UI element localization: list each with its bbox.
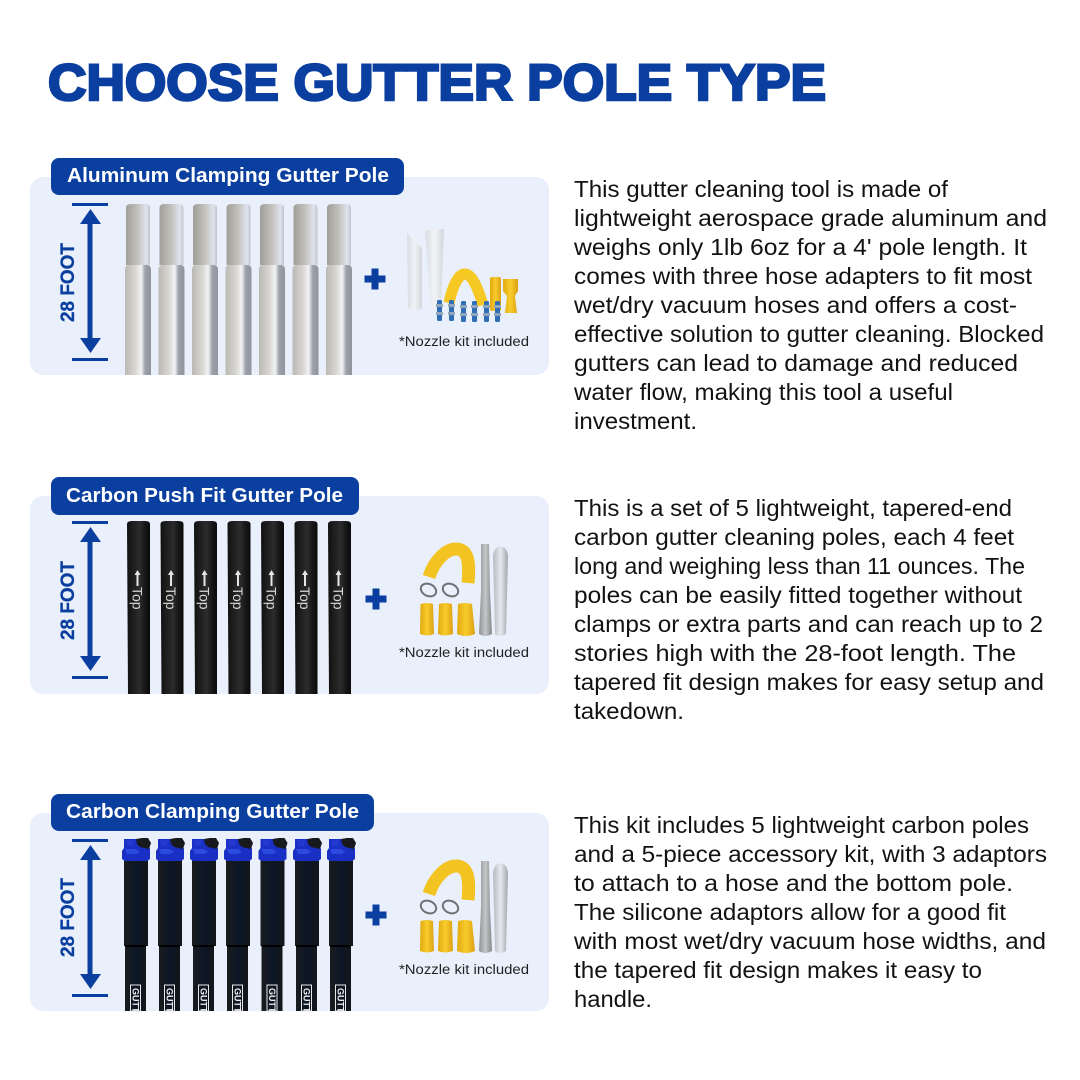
- description: aluminum clamping gutter pole: lightweight aerospace grade aluminum and: [574, 205, 1047, 231]
- height arrow: 28 foot: 28 FOOT: [58, 243, 79, 322]
- panel: carbon push fit gutter pole: [30, 477, 549, 694]
- poles: carbon clamping: GUTT: [232, 988, 242, 1013]
- caption: nozzle kit included: *Nozzle kit included: [399, 962, 529, 977]
- poles: carbon clamping: GUTT: [164, 988, 174, 1013]
- panel: carbon clamping gutter pole: [30, 794, 549, 1013]
- description: aluminum clamping gutter pole: [573, 176, 1047, 434]
- poles: carbon push fit: Top: [196, 587, 212, 610]
- description: carbon push fit gutter pole: [574, 495, 1044, 724]
- description: aluminum clamping gutter pole: wet/dry vacuum hoses and offers a cost-: [573, 292, 1017, 318]
- height arrow: 28 foot: 28 FOOT: [58, 561, 79, 640]
- poles: carbon clamping: GUTT: [130, 988, 140, 1013]
- label: carbon push fit gutter pole: Carbon Push Fit Gutter Pole: [66, 484, 343, 507]
- label: aluminum clamping gutter pole: [51, 158, 404, 195]
- label: carbon push fit gutter pole: [51, 477, 359, 515]
- description: aluminum clamping gutter pole: gutters can lead to damage and reduced: [574, 350, 1018, 376]
- label: carbon clamping gutter pole: Carbon Clamping Gutter Pole: [66, 800, 359, 823]
- nozzle kit: carbon clamping: [419, 861, 508, 953]
- label: aluminum clamping gutter pole: Aluminum Clamping Gutter Pole: [67, 164, 389, 187]
- description: carbon clamping gutter pole: to attach to a hose and the bottom pole.: [574, 870, 1013, 896]
- height arrow: 28 foot: 28 FOOT: [58, 878, 79, 957]
- poles: carbon clamping: GUTT: [198, 988, 208, 1013]
- panel: aluminum clamping gutter pole: [30, 158, 549, 375]
- poles: carbon clamping: GUTT: [336, 988, 346, 1013]
- description: carbon push fit gutter pole: takedown.: [574, 698, 684, 724]
- title: CHOOSE GUTTER POLE TYPE: [48, 54, 826, 111]
- description: carbon push fit gutter pole: tapered fit design makes for easy setup and: [574, 669, 1044, 695]
- description: carbon clamping gutter pole: This kit includes 5 lightweight carbon poles: [574, 812, 1029, 838]
- icon: plus: [364, 268, 386, 290]
- description: aluminum clamping gutter pole: weighs only 1lb 6oz for a 4' pole length. It: [573, 234, 1028, 260]
- height arrow: 28 foot: [58, 521, 108, 679]
- description: carbon clamping gutter pole: with most wet/dry vacuum hose widths, and: [573, 928, 1046, 954]
- description: carbon clamping gutter pole: The silicone adaptors allow for a good fit: [574, 899, 1007, 925]
- description: aluminum clamping gutter pole: investment.: [574, 408, 697, 434]
- description: aluminum clamping gutter pole: This gutter cleaning tool is made of: [574, 176, 949, 202]
- poles: carbon push fit: Top: [230, 587, 246, 610]
- caption: nozzle kit included: *Nozzle kit included: [399, 334, 529, 349]
- poles: carbon clamping: GUTT: [302, 988, 312, 1013]
- poles: carbon clamping: [122, 838, 356, 1013]
- description: carbon clamping gutter pole: the tapered fit design makes it easy to: [574, 957, 982, 983]
- poles: carbon push fit: [127, 521, 351, 694]
- description: carbon clamping gutter pole: [573, 812, 1047, 1012]
- description: carbon push fit gutter pole: clamps or extra parts and can reach up to 2: [574, 611, 1043, 637]
- description: carbon push fit gutter pole: carbon gutter cleaning poles, each 4 feet: [574, 524, 1015, 550]
- poles: carbon push fit: Top: [163, 587, 179, 610]
- description: carbon clamping gutter pole: handle.: [574, 986, 652, 1012]
- label: carbon clamping gutter pole: [51, 794, 374, 831]
- description: carbon push fit gutter pole: stories high with the 28-foot length. The: [574, 640, 1016, 666]
- nozzle kit: carbon push fit: [419, 544, 508, 636]
- description: aluminum clamping gutter pole: water flow, making this tool a useful: [573, 379, 953, 405]
- caption: nozzle kit included: *Nozzle kit included: [399, 645, 529, 660]
- poles: carbon push fit: Top: [330, 587, 346, 610]
- icon: plus: [366, 588, 386, 610]
- height arrow: 28 foot: [58, 203, 108, 361]
- description: carbon push fit gutter pole: long and weighing less than 11 ounces. The: [574, 553, 1025, 579]
- description: carbon push fit gutter pole: This is a set of 5 lightweight, tapered-end: [574, 495, 1012, 521]
- poles: carbon clamping: GUTT: [267, 988, 277, 1013]
- poles: aluminum: [125, 204, 352, 375]
- nozzle kit: aluminum: [407, 229, 518, 322]
- description: aluminum clamping gutter pole: comes with three hose adapters to fit most: [574, 263, 1033, 289]
- description: carbon clamping gutter pole: and a 5-piece accessory kit, with 3 adaptors: [574, 841, 1047, 867]
- description: aluminum clamping gutter pole: effective solution to gutter cleaning. Blocked: [574, 321, 1044, 347]
- poles: carbon push fit: Top: [264, 587, 280, 610]
- description: carbon push fit gutter pole: poles can be easily fitted together without: [574, 582, 1023, 608]
- poles: carbon push fit: Top: [297, 587, 313, 610]
- height arrow: 28 foot: [58, 839, 108, 997]
- icon: plus: [366, 904, 386, 926]
- poles: carbon push fit: Top: [130, 587, 146, 610]
